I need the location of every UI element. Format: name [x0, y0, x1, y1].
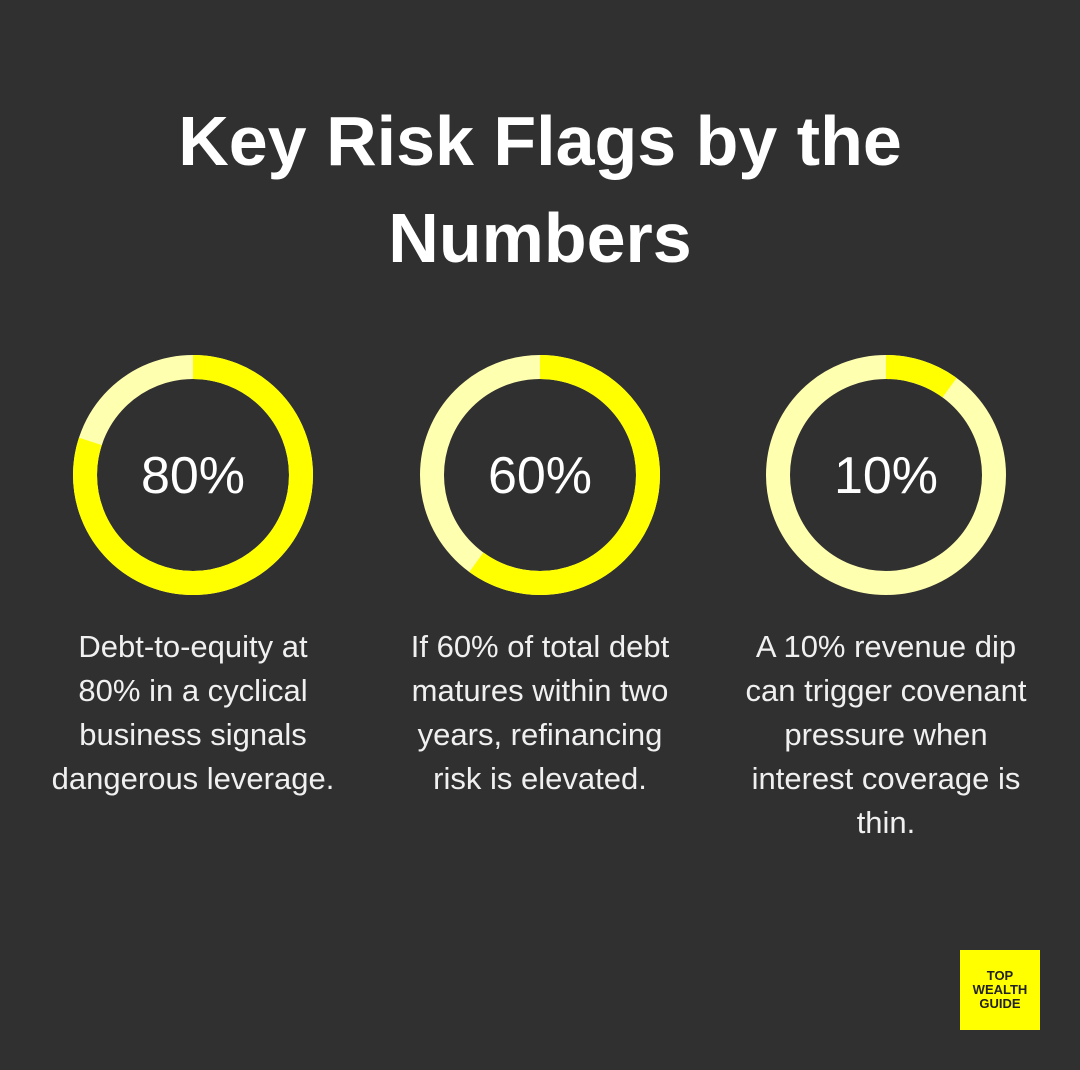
text: 10% description: A 10% revenue dip [756, 629, 1016, 664]
title [178, 102, 902, 277]
logo: GUIDE [979, 996, 1021, 1011]
ring: 10% [766, 355, 1006, 595]
text: 10% description: interest coverage is [752, 761, 1020, 796]
text: 10% description [746, 629, 1026, 840]
ring: 60%: 60% [488, 447, 592, 505]
text: 60% description: If 60% of total debt [411, 629, 669, 664]
logo: WEALTH [973, 982, 1027, 997]
title: Key Risk Flags by the [178, 102, 902, 180]
logo: TOP [987, 968, 1013, 983]
text: 10% description: thin. [857, 805, 915, 840]
title: Numbers [388, 199, 692, 277]
text: 60% description: years, refinancing [418, 717, 662, 752]
text: 80% description [52, 629, 334, 796]
text: 80% description: dangerous leverage. [52, 761, 334, 796]
text: 60% description: risk is elevated. [433, 761, 647, 796]
text: 60% description [411, 629, 669, 796]
text: 10% description: pressure when [784, 717, 988, 752]
text: 80% description: business signals [79, 717, 307, 752]
ring: 80%: 80% [141, 447, 245, 505]
text: 60% description: matures within two [412, 673, 668, 708]
text: 80% description: 80% in a cyclical [78, 673, 308, 708]
ring: 60% [420, 355, 660, 595]
ring: 10%: 10% [834, 447, 938, 505]
text: 10% description: can trigger covenant [746, 673, 1026, 708]
text: 80% description: Debt-to-equity at [78, 629, 308, 664]
logo [960, 950, 1040, 1030]
ring: 80% [73, 355, 313, 595]
